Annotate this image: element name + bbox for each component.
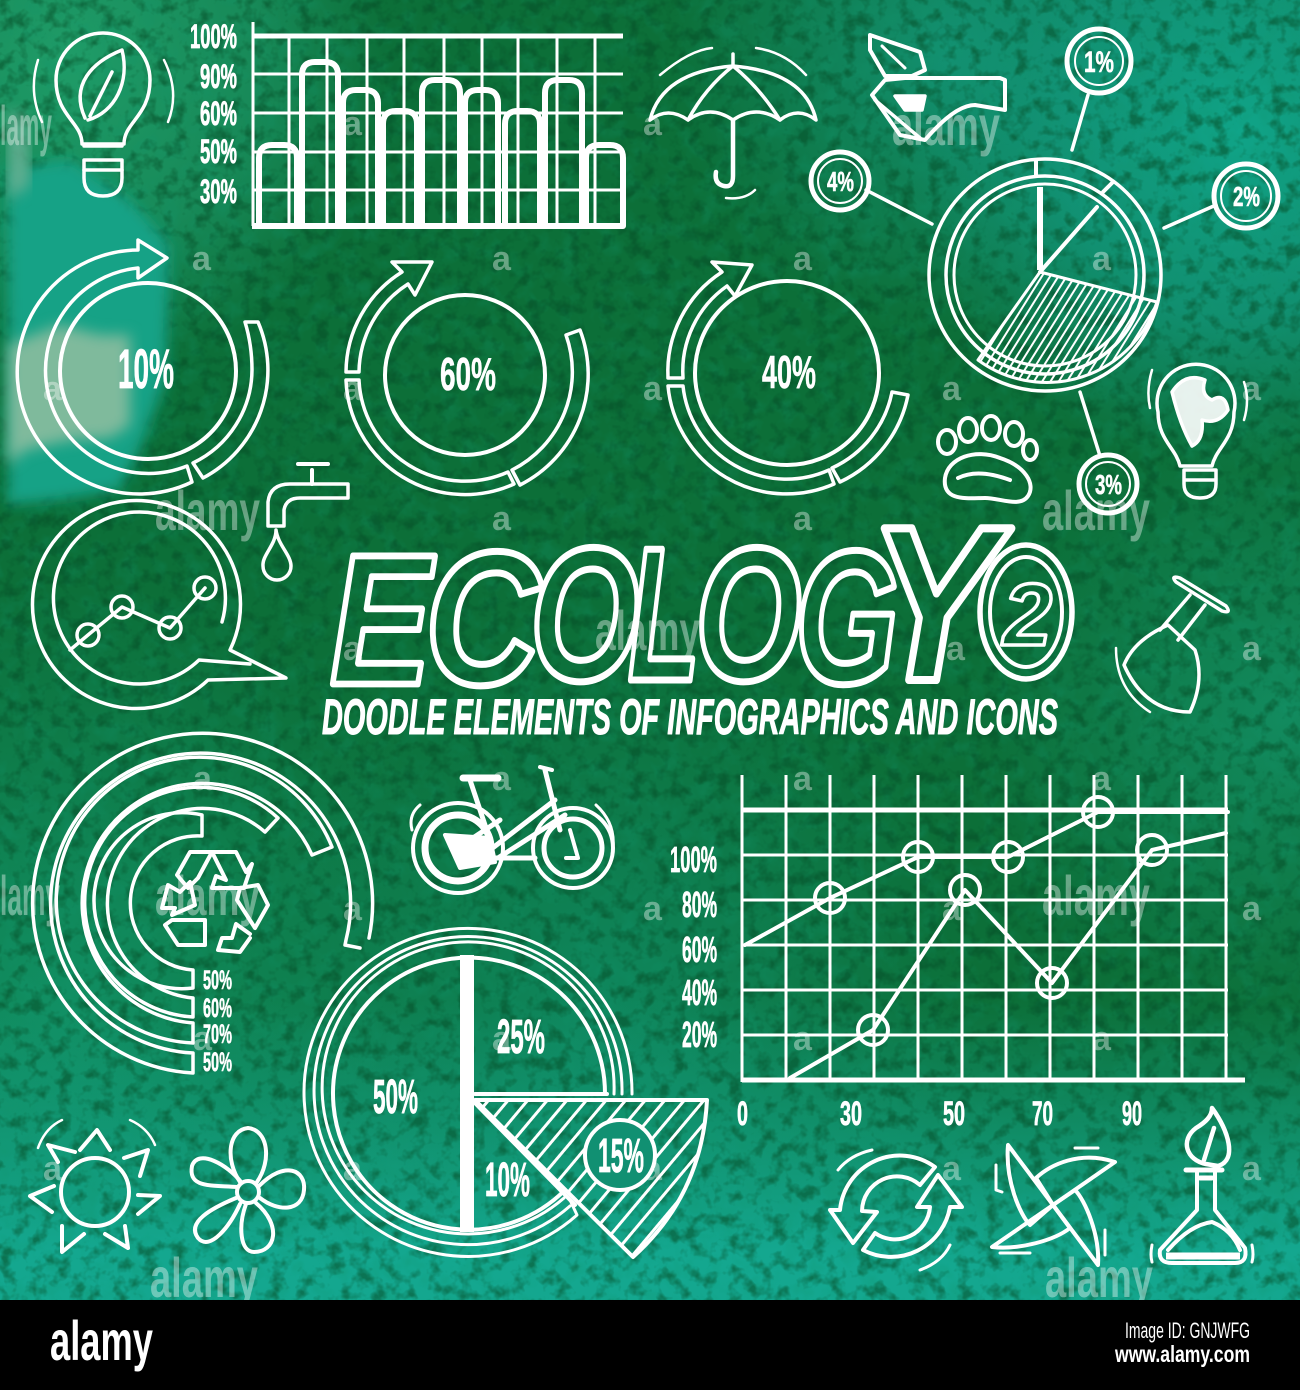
footer url: www.alamy.com [1114,1341,1250,1367]
title: C: C [425,513,542,725]
donut chart: 10% [17,240,268,494]
watermark small letters: aaa [343,630,1262,668]
line chart [670,775,1245,1133]
watermark small letters: aaaaa [43,1150,1262,1188]
footer logo: alamy [50,1309,153,1372]
icon: globe light bulb [1148,364,1247,498]
callout 4% left [811,152,869,210]
x labels: 90 [1122,1095,1142,1133]
bar chart y labels: 60% [200,95,237,133]
x labels: 50 [943,1095,965,1133]
watermark small letters: aaaaa [43,370,1262,408]
watermark words: lamy [0,864,60,927]
watermark small letters: aaaa [193,760,1112,798]
donut chart: 40% [668,262,908,494]
watermark words: alamy [150,1246,258,1309]
icon: shovel [1116,577,1228,712]
callout 4% left: 4% [827,166,854,197]
bar chart y labels: 90% [200,58,237,96]
title: G: G [795,512,898,724]
line chart: 40% [682,972,717,1013]
pie connector lines [866,95,1216,456]
radial bar chart with recycling [33,733,373,1077]
radial bar labels: 70% [203,1019,232,1049]
pie rings [929,159,1161,391]
radial bar labels: 50% [203,965,232,995]
icon: bicycle [411,767,613,893]
title: L: L [628,509,700,721]
watermark small letters [43,105,1262,1188]
title: O: O [530,509,639,721]
title: circled 2: 2 [1001,565,1052,664]
pie hatched wedge [978,272,1157,382]
icon: pinwheel [992,1145,1115,1265]
x labels: 30 [840,1095,862,1133]
pie rings [304,928,632,1256]
x labels: 70 [1032,1095,1053,1133]
icon: umbrella [650,48,816,198]
watermark words: alamy [1042,479,1150,542]
callout 3% bottom [1079,455,1137,513]
data points [815,797,1167,1045]
bar chart y labels [190,18,237,211]
donut chart: 10%: 10% [118,337,174,400]
line chart: 80% [682,884,717,925]
bar chart y labels: 50% [200,133,237,171]
donut chart: 60% [346,262,588,495]
line chart: 20% [682,1014,717,1055]
pie dividers [460,955,474,1232]
watermark words: alamy [1042,864,1150,927]
watermark words: alamy [595,599,700,662]
radial bar labels [203,965,232,1077]
bar chart y labels: 30% [200,173,237,211]
bar chart grid [252,22,623,226]
bar chart y labels: 100% [190,18,237,56]
watermark small letters: aaaa [192,240,1112,278]
pie labels: 10% [485,1154,530,1207]
title: O second: O [695,509,801,721]
radial bar labels: 60% [203,993,232,1023]
icon: paw print [938,416,1037,502]
title [330,480,1072,727]
callout 2% right: 2% [1233,181,1260,212]
donut label: 40% [762,346,816,398]
donut label: 60% [440,348,496,400]
lines [745,812,1228,945]
bar chart: top [190,18,623,226]
icon: light bulb with leaf [34,33,173,196]
watermark words: lamy [0,94,52,157]
callout 15%: 15% [598,1130,644,1183]
pie chart: top right [811,29,1278,513]
watermark small letters: aaaa [193,1020,1112,1058]
watermark words: alamy [1045,1246,1153,1309]
callout 1% top [1067,29,1131,93]
watermark words: alamy [155,864,260,927]
watermark small letters: aaaa [343,890,1262,928]
pie labels [373,1011,545,1207]
title: Y: Y [868,480,1013,727]
title: circled 2 [980,545,1072,679]
title: E: E [330,516,436,725]
icon: recycle arrows [830,1150,962,1270]
watermark small letters: aa [343,105,663,143]
line chart: 60% [682,929,717,970]
icon: recycling [162,852,268,952]
pie chart: bottom: 25% [497,1011,545,1064]
watermark words: alamy [155,479,260,542]
y labels: 100% [670,839,717,880]
footer bar [0,1300,1300,1390]
callout 3% bottom: 3% [1095,469,1122,500]
callout 1% top: 1% [1084,46,1114,79]
icon: flower [192,1128,304,1252]
y labels [670,839,717,1055]
radial bars [33,733,373,1073]
pie chart: bottom [304,928,707,1257]
bar chart bars [259,62,623,226]
callout 15% [585,1120,655,1190]
x labels: 0 [737,1095,748,1133]
icon: water tap [263,464,348,580]
watermark words: alamy [892,94,1000,157]
callout 2% right [1214,164,1278,228]
icon: sun [30,1120,160,1252]
watermark small letters: aa [492,500,813,538]
x labels [737,1095,1142,1133]
pie segments [1037,187,1043,270]
icon: bird on branch [870,35,1005,140]
icon: flask with flame [1151,1108,1253,1263]
speech bubble line chart [32,500,286,708]
watermark words [0,94,1153,1309]
hatched wedge [475,1100,707,1257]
grid [742,775,1245,1082]
pie labels: 50% [373,1071,418,1124]
radial bar labels: 50% [203,1047,232,1077]
